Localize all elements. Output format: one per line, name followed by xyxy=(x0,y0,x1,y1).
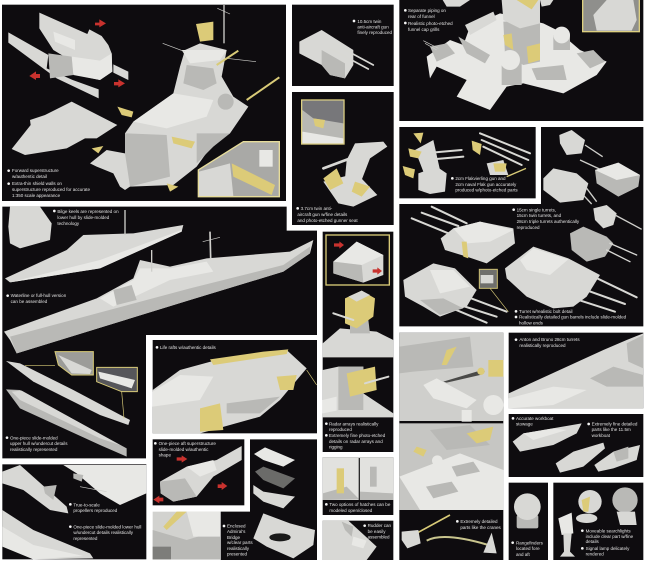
text: turrets: 15cm single turrets, xyxy=(517,208,556,213)
text: rangefinders xyxy=(511,541,544,557)
text: hull: upper hull w/undercut details xyxy=(10,441,68,446)
text: bridge: presented xyxy=(227,552,248,557)
text: rangefinders: Rangefinders xyxy=(516,541,544,546)
panel: forward superstructure xyxy=(2,5,286,201)
text: hull: Waterline or full-hull version xyxy=(11,293,67,298)
text: 3.7cm gun: 3.7cm twin anti- xyxy=(301,206,333,211)
panel: radar xyxy=(323,232,393,452)
text: 3.7cm gun: aircraft gun w/fine details xyxy=(297,212,348,217)
text: workboats xyxy=(512,416,638,438)
upper hull pieces xyxy=(6,361,130,457)
text: Anton and Bruno: realistically reproduced xyxy=(519,343,566,348)
text: rangefinders: and aft xyxy=(516,552,531,557)
inset: gun barrel hollow end xyxy=(479,269,508,312)
superstructure model xyxy=(90,5,279,192)
text: rangefinders: located fore xyxy=(516,546,540,551)
text: flak guns xyxy=(451,176,518,193)
bridge parts xyxy=(253,447,315,558)
panel: aft superstructure xyxy=(153,439,244,505)
text: hull: One-piece slide-molded xyxy=(10,436,58,441)
panel: turrets xyxy=(399,127,643,326)
text: forward superstructure: 1:350 scale appearance xyxy=(12,193,61,198)
text: propellers and hull xyxy=(69,503,141,541)
lower hull models xyxy=(2,465,146,559)
text: bridge: Enclosed xyxy=(227,524,246,529)
text: searchlights: Moveable searchlights xyxy=(586,529,631,534)
text: forward superstructure xyxy=(7,168,91,198)
text: searchlights: details xyxy=(586,539,599,544)
crane parts xyxy=(402,515,497,553)
text: bridge: realistically xyxy=(227,546,250,551)
panel: 3.7cm twin gun xyxy=(292,92,394,225)
text: flak guns: produced w/photo-etched parts xyxy=(455,188,518,193)
text: hull: lower hull by slide-molded xyxy=(57,215,110,220)
text: rudder: Rudder can xyxy=(368,523,392,528)
text: rudder: assembled xyxy=(368,535,390,540)
text: forward superstructure: Forward superstructure xyxy=(12,168,59,173)
text: workboats: Extremely fine detailed xyxy=(592,422,638,427)
text: turrets: 15cm twin turrets, and xyxy=(517,213,562,218)
panel: hatches xyxy=(323,457,393,515)
turret B xyxy=(403,263,507,323)
text: Anton and Bruno: Anton and Bruno 28cm turrets xyxy=(519,337,580,342)
text: propellers and hull: True-to-scale xyxy=(73,503,100,508)
hatches photo xyxy=(323,457,393,500)
panel: cranes xyxy=(399,333,503,560)
text: workboats: stowage xyxy=(516,422,533,427)
text: workboats: workboat xyxy=(592,433,611,438)
upper turrets xyxy=(543,130,640,204)
text: bridge: Admiral's xyxy=(227,529,246,534)
text: cranes: parts like the cranes xyxy=(460,525,501,530)
text: life rafts: Life rafts w/authentic details xyxy=(160,345,216,350)
forward superstructure walls xyxy=(8,13,128,98)
panel: flak guns xyxy=(399,127,536,198)
text: cranes xyxy=(456,519,501,530)
text: 3.7cm gun: and photo-etched gunner seat xyxy=(297,218,358,223)
gun model xyxy=(323,142,387,207)
rudder model xyxy=(323,521,377,560)
text: turrets: hollow ends xyxy=(519,321,544,326)
text: turrets xyxy=(512,208,627,326)
text: rudder: be easily xyxy=(368,529,386,534)
text: searchlights: rendered xyxy=(586,552,604,557)
text: aft superstructure: One-piece aft superstructure xyxy=(159,441,216,446)
text: radar: details on radar arrays and xyxy=(329,439,383,444)
inset detail xyxy=(198,142,279,197)
turret A xyxy=(412,207,515,263)
funnel platform model xyxy=(423,0,607,110)
text: workboats: parts like the 11.5m xyxy=(592,427,631,432)
text: turrets: reproduced xyxy=(517,225,540,230)
text: funnel: rear of funnel xyxy=(408,14,435,19)
text: Anton and Bruno xyxy=(515,337,580,348)
red arrows xyxy=(153,455,227,503)
text: hull: technology xyxy=(57,221,80,226)
text: funnel xyxy=(404,8,453,32)
radar tower upper xyxy=(323,291,393,357)
ship: upper view xyxy=(5,210,183,282)
text: propellers and hull: represented xyxy=(73,536,98,541)
panel: rudder xyxy=(323,521,393,560)
text: searchlights: include clear part w/fine xyxy=(586,534,634,539)
text: searchlights xyxy=(581,529,634,557)
text: workboats: Accurate workboat xyxy=(516,416,554,421)
text: searchlights: Signal lamp delicately xyxy=(586,546,630,551)
text: radar: Extremely fine photo-etched xyxy=(329,433,386,438)
aft superstructure model xyxy=(160,446,242,502)
panel: searchlights xyxy=(553,483,643,560)
text: hull xyxy=(6,209,119,452)
text: 10.5cm gun: anti-aircraft gun xyxy=(357,25,389,30)
deck detail top xyxy=(399,333,503,422)
text: 10.5cm gun: finely reproduced xyxy=(357,30,392,35)
text: hull: can be assembled xyxy=(11,299,48,304)
panel: propellers and lower hull xyxy=(2,464,146,559)
text: turrets: 28cm triple turrets authentically xyxy=(517,219,580,224)
panel: hull xyxy=(2,207,317,458)
inset: funnel cap xyxy=(583,0,639,32)
text: flak guns: 2cm naval Flak gun accurately xyxy=(455,182,517,187)
text: funnel: Separate piping on xyxy=(408,8,446,13)
gun model xyxy=(299,30,373,78)
red arrows xyxy=(29,19,125,87)
text: turrets: Realistically detailed gun barrels include slide-molded xyxy=(519,315,627,320)
deck plate xyxy=(12,102,117,155)
text: rudder xyxy=(363,523,392,540)
text: funnel: funnel cap grills xyxy=(408,27,440,32)
text: bridge xyxy=(223,524,253,557)
right flak gun xyxy=(472,133,530,177)
rangefinder model xyxy=(514,493,541,528)
text: hatches: modeled open/closed xyxy=(329,508,373,513)
text: forward superstructure: superstructure reproduced for accurate xyxy=(12,187,91,192)
text: propellers and hull: w/undercut details realistically xyxy=(73,530,134,535)
text: hull: Bilge keels are represented on xyxy=(57,209,119,214)
bridge photo xyxy=(153,512,220,560)
deck detail bottom xyxy=(399,423,503,510)
panel: funnel xyxy=(399,0,643,121)
text: aft superstructure: shape xyxy=(159,453,171,458)
text: radar: reproduced xyxy=(329,427,352,432)
panel: life rafts xyxy=(153,340,317,433)
text: cranes: Extremely detailed xyxy=(460,519,498,524)
single and twin small turrets xyxy=(570,205,642,262)
text: bridge: Bridge xyxy=(227,535,241,540)
inset: turret top xyxy=(326,235,389,285)
workboat models xyxy=(513,423,640,473)
turret C xyxy=(505,247,637,312)
text: hatches: Two options of hatches can be xyxy=(329,502,391,507)
radar tower lower xyxy=(323,367,393,417)
panel: 10.5cm twin gun xyxy=(292,5,394,86)
text: hull: realistically represented xyxy=(10,447,58,452)
text: turrets: Turret w/realistic bolt detail xyxy=(519,309,573,314)
inset: gunner seat xyxy=(302,100,344,144)
insets: hull details xyxy=(25,352,137,418)
panel: Anton and Bruno turrets xyxy=(509,333,643,408)
text: 3.7cm gun xyxy=(296,206,358,223)
text: aft superstructure xyxy=(154,441,216,458)
text: bridge: w/clear parts xyxy=(227,540,253,545)
text: forward superstructure: w/authentic detail xyxy=(12,174,47,179)
panel: rangefinders xyxy=(509,483,548,560)
searchlight models xyxy=(558,487,638,557)
text: forward superstructure: Extra-thin shield walls on xyxy=(12,181,62,186)
text: hatches xyxy=(325,502,391,513)
text: radar: rigging xyxy=(329,445,343,450)
aft deck model xyxy=(153,349,317,433)
foredeck model xyxy=(509,333,643,408)
text: radar xyxy=(325,422,386,450)
text: propellers and hull: propellers reproduced xyxy=(73,508,118,513)
text: 10.5cm gun: 10.5cm twin xyxy=(357,19,382,24)
text: propellers and hull: One-piece slide-molded lower hull xyxy=(73,525,141,530)
text: flak guns: 2cm Flakvierling gun and xyxy=(455,176,506,181)
ship: main view xyxy=(4,232,313,353)
left flak gun xyxy=(403,133,463,194)
text: 10.5cm gun xyxy=(353,19,392,35)
text: funnel: Realistic photo-etched xyxy=(408,21,453,26)
text: radar: Radar arrays realistically xyxy=(329,422,379,427)
text: aft superstructure: slide-molded w/authentic xyxy=(159,447,209,452)
panel: admiral's bridge xyxy=(153,439,317,560)
inset: bilge keel xyxy=(8,207,52,248)
panel: workboats xyxy=(509,414,643,477)
